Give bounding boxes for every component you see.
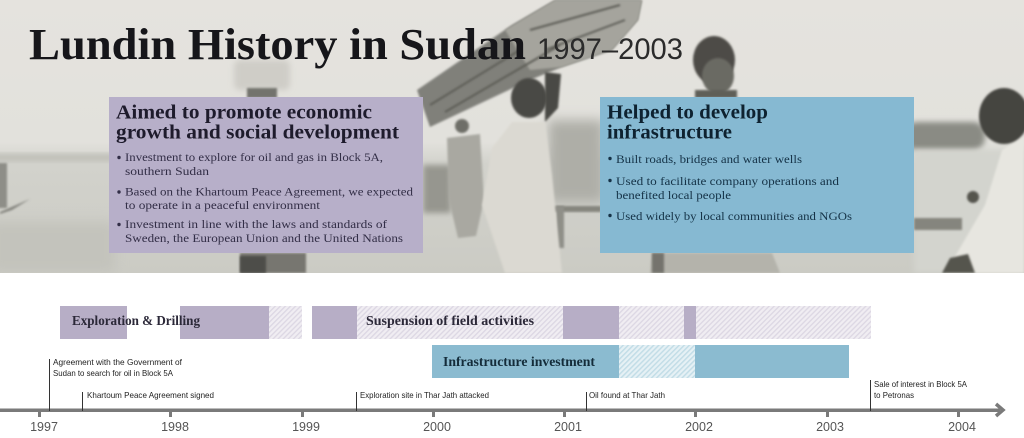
bullet list: southern Sudan	[125, 164, 209, 178]
event: Khartoum Peace Agreement: Khartoum Peace Agreement signed	[87, 390, 214, 400]
panel: economic growth	[109, 97, 423, 253]
background photo: people carrying loads on a bridge	[0, 0, 1024, 273]
far horizon on the left	[0, 154, 115, 161]
year labels: 2003	[816, 420, 844, 434]
bullet list: Sweden, the European Union and the United Nations	[125, 231, 403, 245]
bullet list: Used to facilitate company operations and	[616, 174, 839, 188]
trees and rail behind the carrier	[548, 120, 604, 202]
event: agreement with government	[49, 357, 183, 411]
event: sale of interest: to Petronas	[874, 390, 914, 400]
year labels: 1998	[161, 420, 189, 434]
event: exploration site attacked: Exploration site in Thar Jath attacked	[360, 390, 489, 400]
year labels: 2002	[685, 420, 713, 434]
timeline bar: exploration and drilling	[60, 306, 302, 339]
event: sale of interest: Sale of interest in Block 5A	[874, 379, 967, 389]
woman with basket	[234, 60, 290, 90]
bullet list: Built roads, bridges and water wells	[616, 152, 802, 166]
bullet list: Investment in line with the laws and standards of	[125, 217, 387, 231]
panel heading	[116, 102, 399, 144]
event: Khartoum Peace Agreement	[82, 390, 214, 411]
distant figure and shadow on the left	[0, 163, 7, 208]
title: 1997–2003	[537, 33, 683, 66]
man on the right	[955, 145, 1024, 273]
year labels: 1999	[292, 420, 320, 434]
title: Lundin History in Sudan	[29, 20, 526, 69]
bundle of reeds	[417, 0, 642, 127]
year labels: 2000	[423, 420, 451, 434]
panel: infrastructure	[600, 97, 914, 253]
event: exploration site attacked	[356, 390, 489, 411]
event: agreement with government: Agreement with the Government of	[53, 357, 183, 367]
bullet list: to operate in a peaceful environment	[125, 198, 321, 212]
bar label: Suspension of field activities	[366, 313, 534, 328]
bullet list	[608, 152, 852, 223]
bullet list: Used widely by local communities and NGOs	[616, 209, 852, 223]
walking man in background	[455, 119, 469, 133]
panel heading: infrastructure	[607, 122, 732, 144]
person carrying reeds	[511, 78, 547, 118]
panel heading: growth and social development	[116, 122, 399, 144]
event: agreement with government: Sudan to search for oil in Block 5A	[53, 368, 173, 378]
bullet list: Investment to explore for oil and gas in Block 5A,	[125, 150, 383, 164]
event: oil found	[586, 390, 665, 411]
panel heading: Helped to develop	[607, 102, 768, 124]
timeline axis with arrow	[0, 404, 1003, 417]
bar label: Exploration & Drilling	[72, 313, 200, 328]
panel heading: Aimed to promote economic	[116, 102, 372, 124]
bullet list	[117, 150, 413, 245]
event: oil found: Oil found at Thar Jath	[589, 390, 665, 400]
bullet list: benefited local people	[616, 188, 731, 202]
year labels	[30, 420, 976, 434]
panel heading	[607, 102, 768, 144]
timeline bar: infrastructure investment	[432, 345, 849, 378]
year labels: 2001	[554, 420, 582, 434]
island across the water	[905, 122, 985, 150]
year labels: 2004	[948, 420, 976, 434]
truck and railing behind the panel	[423, 165, 451, 213]
bullet list: Based on the Khartoum Peace Agreement, we expected	[125, 184, 413, 198]
bar label: Infrastructure investment	[443, 354, 596, 369]
bridge rail on the right	[914, 218, 962, 230]
timeline bar: suspension of field activities	[312, 306, 871, 339]
event: sale of interest	[870, 379, 967, 411]
year labels: 1997	[30, 420, 58, 434]
boy in the centre	[693, 36, 735, 84]
